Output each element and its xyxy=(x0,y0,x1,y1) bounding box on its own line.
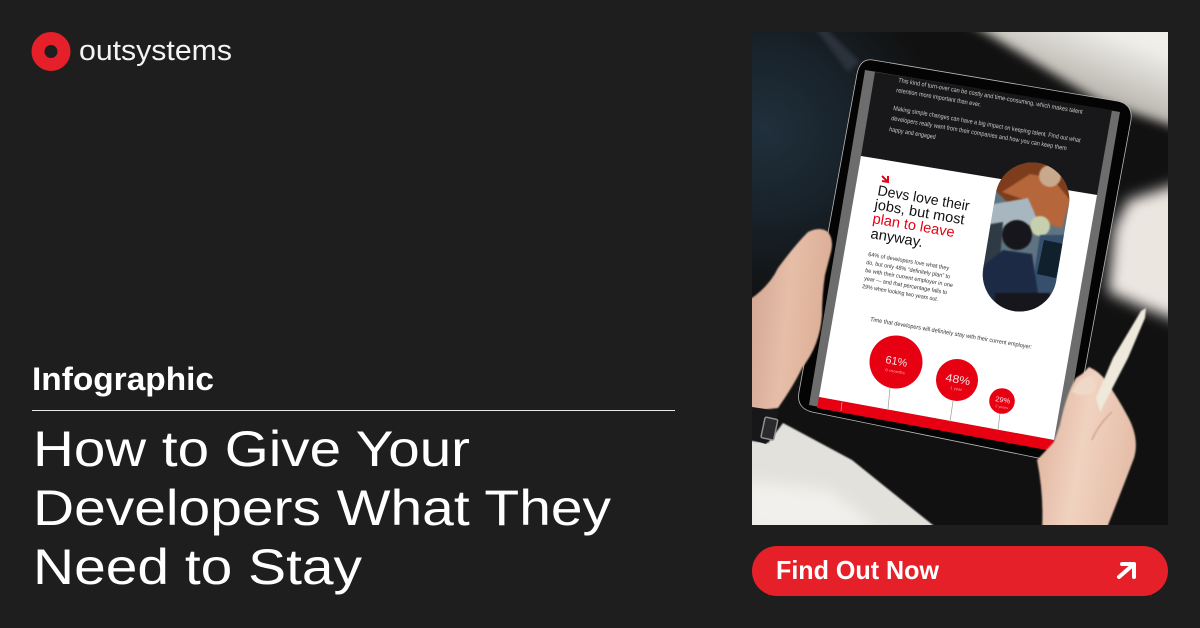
logo: OutSystems xyxy=(38,35,232,67)
body copy on tablet: do, but only 48% “definitely plan” to xyxy=(866,260,950,280)
screen dark section xyxy=(861,72,1112,195)
tablet screen grey margins xyxy=(809,70,1120,452)
heading on tablet: plan to leave xyxy=(871,211,956,241)
dark section text: developers really want from their companies and how you can keep them xyxy=(891,115,1067,152)
screen white section xyxy=(819,156,1097,440)
bubble: 61% xyxy=(870,336,922,388)
bubble: 48% xyxy=(936,359,978,401)
heading on tablet xyxy=(869,183,971,251)
body copy on tablet: be with their current employer in one xyxy=(865,268,953,289)
dark section text: This kind of turn-over can be costly and time-consuming, which makes talent xyxy=(898,77,1083,116)
bubble: 29% xyxy=(989,388,1015,414)
title: How to Give Your xyxy=(33,421,470,477)
bubble: 48%: 48% xyxy=(944,372,971,388)
tablet xyxy=(799,60,1131,461)
left hand xyxy=(745,229,832,412)
watch buckle xyxy=(761,417,778,440)
title: Need to Stay xyxy=(33,539,362,595)
thumbnail shading xyxy=(1072,376,1096,395)
logo wordmark: outsystems xyxy=(79,35,232,67)
watch strap xyxy=(752,407,778,444)
body copy on tablet xyxy=(862,252,953,303)
dark section text xyxy=(889,77,1083,152)
body copy on tablet: year — and that percentage falls to xyxy=(864,276,947,296)
dark section text: Making simple changes can have a big impact on keeping talent. Find out what xyxy=(893,105,1081,144)
heading on tablet: Devs love their xyxy=(876,183,971,215)
bubble: 29%: 2 years xyxy=(995,404,1009,410)
bubble: 61%: 6 months xyxy=(885,367,905,375)
right hand xyxy=(1037,367,1136,530)
finger crease shading xyxy=(1092,412,1112,440)
body copy on tablet: 64% of developers love what they xyxy=(868,252,950,272)
icon: logo ring xyxy=(38,38,64,64)
title: Developers What They xyxy=(33,480,611,536)
bubble: 61%: 61% xyxy=(884,354,908,370)
photo: hands holding a tablet xyxy=(745,20,1190,530)
stylus pen xyxy=(1096,308,1146,412)
heading on tablet: jobs, but most xyxy=(872,197,966,228)
bubble: 29%: 29% xyxy=(995,396,1011,406)
icon: up-right arrow xyxy=(1119,564,1134,577)
photo capsule on tablet xyxy=(982,162,1070,312)
body copy on tablet: 29% when looking two years out. xyxy=(862,284,939,303)
photo backdrop xyxy=(752,32,1168,525)
icon: small red arrow xyxy=(882,176,888,182)
dark section text: retention more important than ever. xyxy=(896,87,982,109)
lollipop chart on tablet xyxy=(870,336,1015,430)
CTA button: Find Out Now xyxy=(752,546,1168,596)
dark section text: happy and engaged xyxy=(889,126,937,141)
heading on tablet: anyway. xyxy=(869,226,924,251)
eyebrow: Infographic: Infographic xyxy=(32,361,214,397)
button label: Find Out Now xyxy=(776,555,940,585)
tablet body xyxy=(799,60,1131,461)
chart caption on tablet: Time that developers will definitely stay with their current employer: xyxy=(870,317,1033,351)
title xyxy=(33,421,611,595)
bubble: 48%: 1 year xyxy=(950,385,963,392)
screen red footer band xyxy=(817,397,1054,451)
left hand with watch xyxy=(745,229,832,444)
